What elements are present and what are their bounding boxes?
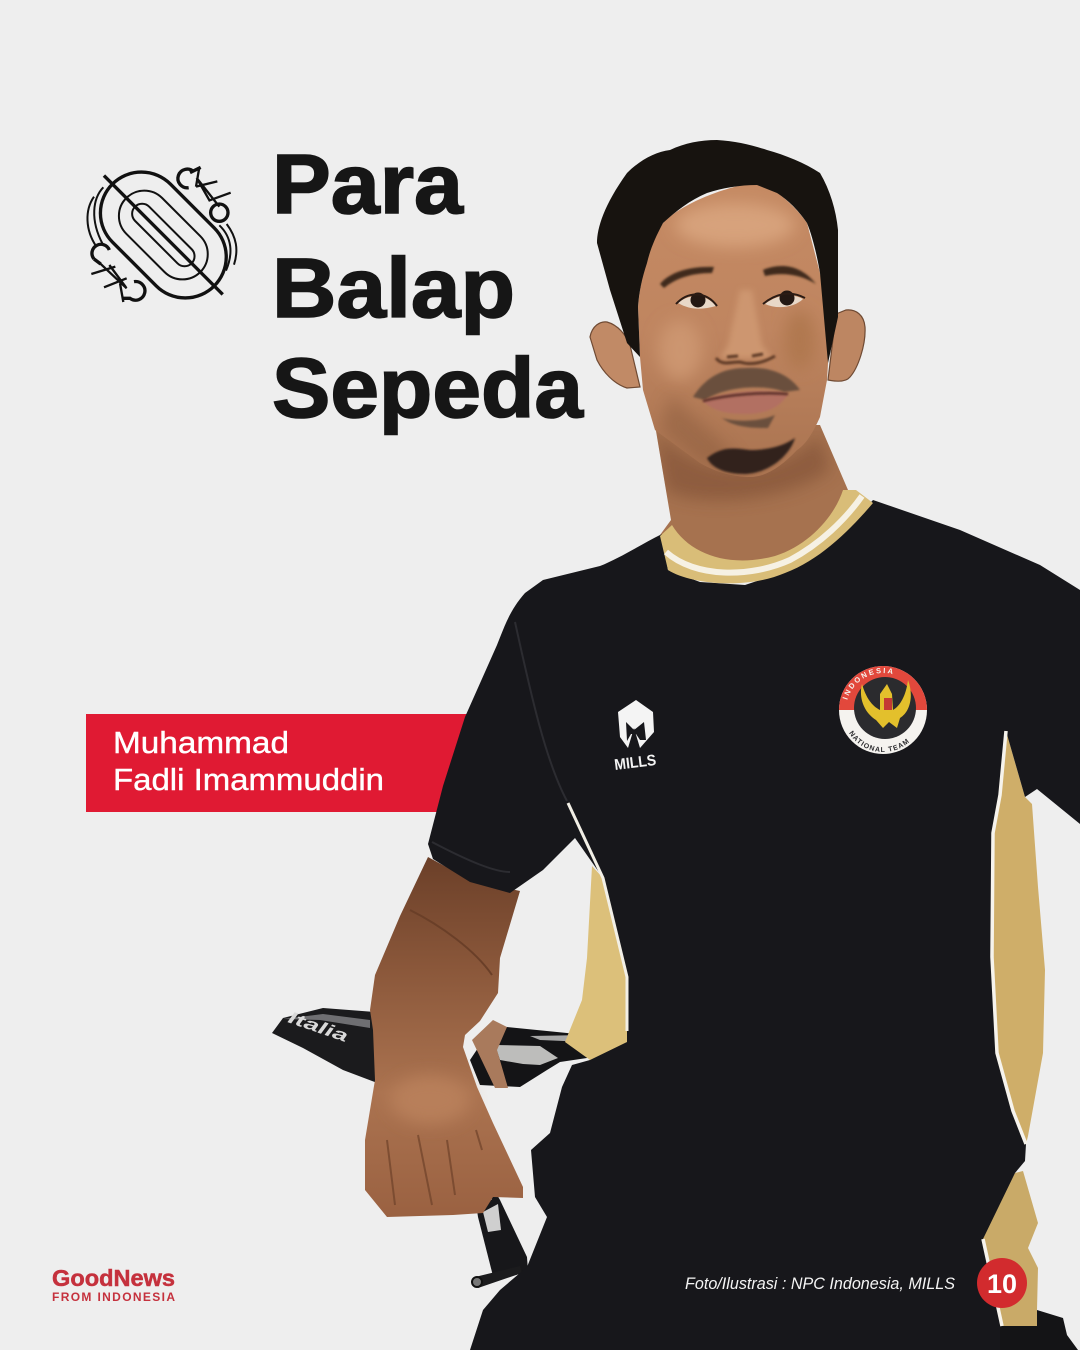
moustache xyxy=(693,368,800,400)
lips xyxy=(703,391,788,414)
logo: Indonesia national team crest: NATIONAL TEAM xyxy=(849,730,909,752)
left ear xyxy=(590,322,640,388)
nose xyxy=(716,354,775,364)
arm elbow crease xyxy=(410,910,492,975)
eyebrows xyxy=(660,266,816,288)
logo: Indonesia national team crest: INDONESIA xyxy=(842,668,892,700)
jersey sleeve seams xyxy=(432,622,567,872)
title: Balap xyxy=(272,241,515,335)
brand logo: GoodNews from Indonesia: FROM INDONESIA xyxy=(52,1290,175,1304)
photo credit: Foto/Ilustrasi : NPC Indonesia, MILLS xyxy=(685,1275,955,1293)
title: Sepeda xyxy=(272,341,584,435)
athlete name: Muhammad xyxy=(113,725,289,760)
name label xyxy=(86,714,476,812)
logo: Indonesia national team crest xyxy=(839,666,927,754)
brand logo: GoodNews from Indonesia: GoodNews xyxy=(52,1265,175,1291)
neck xyxy=(656,425,848,560)
saddle and seat post xyxy=(272,1008,587,1288)
gold side panel right upper xyxy=(990,731,1045,1144)
jersey lower right corner xyxy=(1000,1310,1078,1350)
athlete name xyxy=(113,725,384,797)
logo: MILLS: MILLS xyxy=(613,752,657,774)
face xyxy=(638,182,830,477)
eyes xyxy=(678,295,803,309)
page number badge: 10 xyxy=(987,1269,1017,1299)
saddle and seat post: Italia xyxy=(286,1008,351,1046)
arm and hand xyxy=(365,857,523,1217)
title: Para xyxy=(272,137,464,231)
logo: MILLS xyxy=(613,700,657,774)
black jersey xyxy=(428,500,1080,1350)
hair xyxy=(597,140,838,363)
jersey collar xyxy=(660,490,873,583)
icon: para cycling velodrome xyxy=(75,147,252,323)
goatee xyxy=(707,438,795,474)
brand logo: GoodNews from Indonesia xyxy=(52,1265,175,1304)
right ear xyxy=(828,310,865,381)
jersey white piping left xyxy=(568,803,627,1031)
gold side panel right lower xyxy=(980,1171,1038,1330)
title xyxy=(272,137,584,435)
page number badge xyxy=(977,1258,1027,1308)
athlete photo illustration xyxy=(272,140,1080,1350)
gold side panel left xyxy=(565,866,630,1066)
jersey white piping right xyxy=(983,731,1026,1326)
athlete name: Fadli Imammuddin xyxy=(113,762,384,797)
